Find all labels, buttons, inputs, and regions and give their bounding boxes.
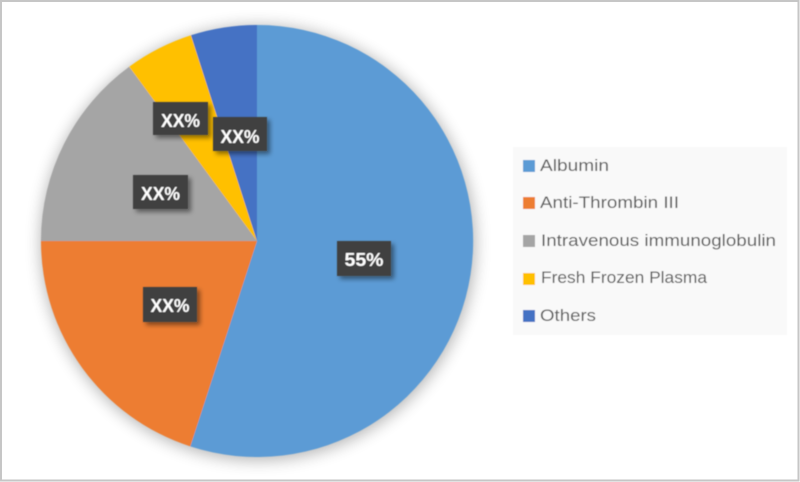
legend item: Anti-Thrombin III: Anti-Thrombin III bbox=[540, 193, 679, 212]
data labels bbox=[133, 102, 391, 322]
label: Albumin 55%: 55% bbox=[344, 250, 384, 270]
slice: Fresh Frozen Plasma bbox=[129, 35, 257, 241]
label: Others XX%: XX% bbox=[220, 127, 260, 147]
label: Anti-Thrombin III XX%: XX% bbox=[150, 296, 190, 316]
pie chart bbox=[41, 25, 473, 457]
legend item: Albumin: Albumin bbox=[540, 156, 609, 175]
legend item: Others: Others bbox=[540, 306, 596, 325]
slice: Intravenous immunoglobulin bbox=[41, 67, 257, 241]
legend item: Fresh Frozen Plasma: Fresh Frozen Plasma bbox=[541, 268, 708, 287]
label: Intravenous immunoglobulin XX%: XX% bbox=[141, 184, 180, 204]
label: Albumin 55% bbox=[337, 241, 391, 276]
slice: Anti-Thrombin III bbox=[41, 241, 257, 446]
slice: Albumin 55% bbox=[190, 25, 473, 457]
label: Others XX% bbox=[213, 117, 267, 151]
slice: Others bbox=[191, 25, 257, 241]
legend item: Intravenous immunoglobulin: Intravenous immunoglobulin bbox=[541, 231, 776, 250]
label: Intravenous immunoglobulin XX% bbox=[133, 175, 188, 209]
legend item: Others bbox=[523, 306, 596, 325]
label: Fresh Frozen Plasma XX% bbox=[153, 102, 208, 135]
label: Fresh Frozen Plasma XX%: XX% bbox=[161, 111, 200, 131]
legend bbox=[513, 147, 787, 335]
label: Anti-Thrombin III XX% bbox=[143, 287, 197, 322]
